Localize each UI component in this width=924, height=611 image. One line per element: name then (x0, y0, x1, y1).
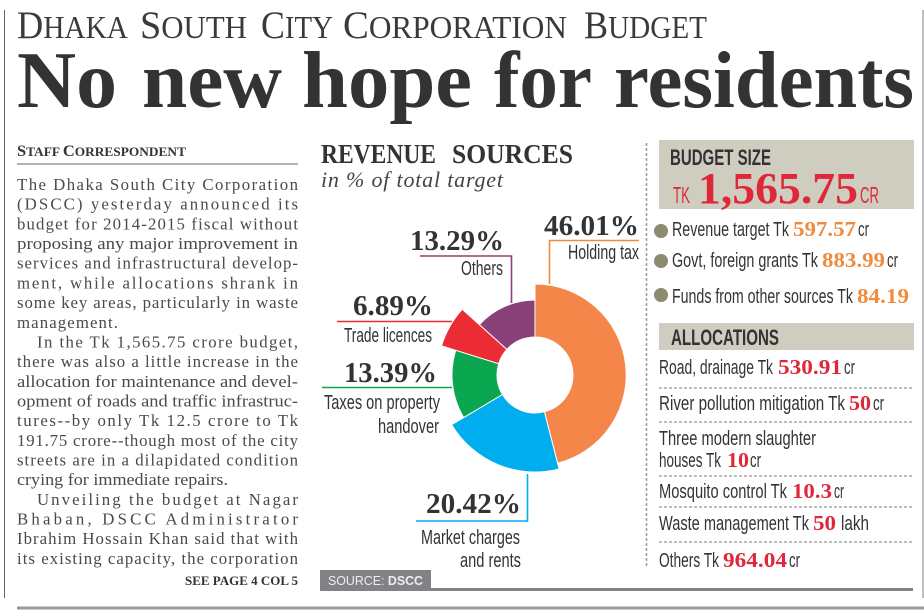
label: taxes on property handover: 13.39% (344, 358, 437, 389)
panel: allocations (659, 323, 914, 572)
heading: allocations: ALLOCATIONS (671, 325, 779, 350)
budget sources list (654, 217, 909, 308)
article body: crying for immediate repairs. (17, 470, 228, 489)
article body: management. (17, 313, 118, 332)
item: mosquito control: 10.3 (792, 479, 832, 503)
item: road, drainage: 530.91 (778, 355, 842, 379)
main title: new (142, 37, 282, 125)
item: government and foreign grants: Govt, foreign grants Tk (672, 250, 819, 272)
item: others: 964.04 (723, 548, 787, 572)
label: others: 13.29% (410, 226, 504, 257)
label: taxes on property handover: handover (378, 416, 439, 438)
label: trade licences: Trade licences (344, 325, 432, 347)
chart heading (321, 139, 573, 192)
article body: In the Tk 1,565.75 crore budget, (37, 332, 298, 351)
article body: Ibrahim Hossain Khan said that with (17, 529, 299, 548)
item: road, drainage: cr (844, 357, 855, 379)
continuation note: SEE PAGE 4 COL 5 (185, 574, 298, 588)
slice: others (479, 300, 535, 350)
article body: allocation for maintenance and devel- (17, 372, 298, 391)
item: revenue target: cr (858, 219, 869, 241)
item: river pollution mitigation: River pollution mitigation Tk (659, 393, 846, 415)
budget total: CR (860, 182, 879, 208)
label: taxes on property handover (322, 358, 452, 438)
main title: No (17, 37, 117, 125)
kicker (17, 4, 707, 47)
item: funds from other sources: 84.19 (857, 284, 909, 308)
kicker: SOUTH (140, 4, 247, 47)
budget total: 1,565.75 (698, 164, 858, 213)
item: river pollution mitigation: 50 (849, 391, 871, 415)
article body (17, 175, 299, 568)
label: trade licences: 6.89% (353, 291, 433, 322)
label: market charges and rents: Market charges (421, 527, 520, 549)
slice: taxes on property handover (452, 350, 502, 418)
budget total: TK (673, 182, 690, 208)
label: others: Others (461, 258, 503, 280)
item: government and foreign grants: cr (887, 250, 898, 272)
main title: residents (614, 37, 914, 125)
article body: opment of roads and traffic infrastruc- (17, 392, 298, 410)
article body: (DSCC) yesterday announced its (17, 195, 298, 214)
item: slaughter houses: houses Tk (659, 450, 722, 472)
item: waste management: Waste management Tk (659, 513, 810, 535)
source tag: SOURCE: DSCC (328, 573, 424, 588)
kicker: CITY (261, 4, 333, 47)
panel: budget size (659, 140, 914, 213)
main title: hope (302, 37, 472, 125)
kicker: DHAKA (17, 4, 128, 47)
article body: its existing capacity, the corporation (17, 549, 299, 568)
byline: STAFF CORRESPONDENT (17, 143, 186, 160)
label: market charges and rents: and rents (460, 550, 521, 572)
main title (17, 37, 914, 125)
label: holding tax: Holding tax (568, 242, 639, 264)
source tag (320, 570, 913, 591)
item: waste management: 50 (813, 511, 836, 535)
item: mosquito control: Mosquito control Tk (659, 481, 788, 503)
slice: trade licences (442, 309, 507, 364)
item: revenue target (654, 217, 869, 241)
item: slaughter houses (659, 428, 816, 472)
label: holding tax: 46.01% (544, 211, 639, 242)
item: road, drainage: Road, drainage Tk (659, 357, 774, 379)
item: funds from other sources: Funds from other sources Tk (672, 286, 854, 308)
item: others: cr (789, 550, 800, 572)
header (17, 4, 914, 125)
item: government and foreign grants: 883.99 (822, 248, 885, 272)
label: market charges and rents (416, 474, 528, 572)
item: revenue target: 597.57 (793, 217, 856, 241)
label: trade licences (337, 291, 452, 347)
chart heading: SOURCES (452, 139, 573, 169)
item: revenue target: Revenue target Tk (672, 219, 790, 241)
article body: streets are in a dilapidated condition (17, 450, 299, 470)
item: mosquito control: cr (834, 481, 844, 503)
article body: ment, while allocations shrank in (17, 273, 299, 292)
article body: budget for 2014-2015 fiscal without (17, 214, 298, 233)
article column (17, 143, 299, 588)
label: market charges and rents: 20.42% (426, 489, 521, 520)
article body: Bhaban, DSCC Administrator (17, 510, 298, 529)
slice: holding tax (535, 284, 626, 463)
label: others (410, 226, 512, 303)
chart heading: in % of total target (321, 167, 504, 192)
item: others (659, 548, 800, 572)
donut chart (442, 284, 626, 472)
article body: 191.75 crore--though most of the city (17, 431, 299, 450)
item: slaughter houses: Three modern slaughter (659, 428, 816, 450)
item: slaughter houses: 10 (727, 448, 749, 472)
chart heading: REVENUE (321, 139, 436, 169)
item: slaughter houses: cr (750, 450, 761, 472)
kicker: CORPORATION (343, 4, 567, 47)
article body: Unveiling the budget at Nagar (37, 490, 298, 509)
article body: The Dhaka South City Corporation (17, 175, 299, 194)
item: waste management: lakh (841, 513, 869, 535)
heading: budget size: BUDGET SIZE (670, 145, 771, 170)
label: taxes on property handover: Taxes on property (324, 392, 440, 414)
slice: market charges and rents (452, 394, 559, 472)
article body: proposing any major improvement in (17, 234, 299, 253)
kicker: BUDGET (584, 4, 707, 47)
main title: for (494, 37, 592, 125)
article body: services and infrastructural develop- (17, 254, 298, 273)
article body: tures--by only Tk 12.5 crore to Tk (17, 411, 299, 430)
article body: there was also a little increase in the (17, 352, 298, 371)
item: river pollution mitigation: cr (873, 393, 884, 415)
item: others: Others Tk (659, 550, 720, 572)
article body: some key areas, particularly in waste (17, 293, 298, 312)
label: holding tax (544, 211, 639, 284)
